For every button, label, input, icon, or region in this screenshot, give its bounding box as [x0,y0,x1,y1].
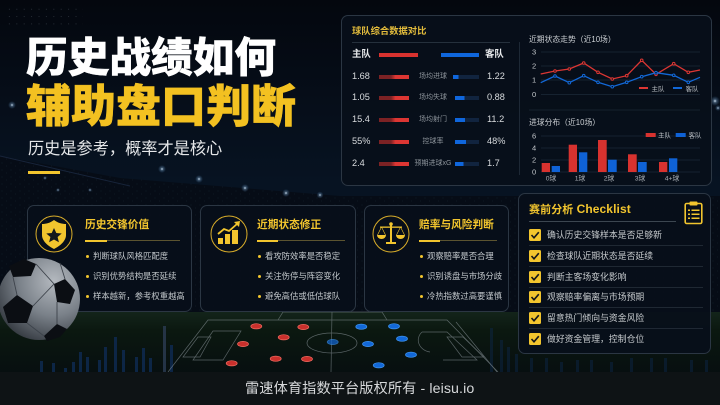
heading rule [85,240,180,241]
row: expected goals: 2.4 [352,158,365,168]
bullet list [86,251,185,301]
row: shots: 场均射门 [419,116,447,123]
row: goals scored: 场均进球 [419,73,447,80]
item divider [529,245,703,246]
bar chart: 主队 [658,130,672,140]
heading rule [419,240,497,241]
home header bar [379,52,418,56]
item divider [529,307,703,308]
bullet list [258,251,340,301]
item divider [529,287,703,288]
bar chart: 0 [532,168,536,176]
checklist item 4: 观察赔率偏离与市场预期 [547,292,644,302]
checklist item 3: 判断主客场变化影响 [547,272,627,282]
line chart [532,48,700,99]
row: expected goals: 预期进球xG [415,160,451,167]
bullet list [420,251,502,301]
bullet list: 识别优势结构是否延续 [93,271,176,281]
row: possession: 55% [352,136,370,146]
row: expected goals [352,158,500,168]
title line 2: 辅助盘口判断 [26,81,296,132]
checklist item 1: 确认历史交锋样本是否足够新 [547,230,662,240]
card heading: 历史交锋价值 [85,219,149,231]
line chart: 主队 [652,84,665,93]
bullet list: 识别诱盘与市场分歧 [427,271,502,281]
row: shots: 15.4 [352,114,370,124]
row: goals scored [352,71,505,81]
line chart: 客队 [686,84,699,93]
footer bar [0,372,720,405]
line chart: 0 [532,90,536,99]
checklist item 3 [529,271,627,283]
away header bar [441,52,479,56]
line chart: 1 [532,76,536,84]
row: shots: 11.2 [487,114,504,124]
row: possession: 48% [487,136,505,146]
bullet list: 冷热指数过高要谨慎 [427,291,502,301]
icon: scales [372,216,410,252]
line chart: 2 [532,62,536,70]
panel: recent form [200,205,356,312]
panel: history value [27,205,192,312]
bar chart: 2球 [604,174,614,182]
icon: shield [36,216,72,252]
divider between table and charts [519,42,520,175]
bar chart: 2 [532,156,536,164]
bullet list: 观察赔率是否合理 [427,251,494,261]
card heading: 赔率与风险判断 [419,219,494,231]
panel: odds and risk [364,205,509,312]
row: shots [352,114,504,124]
bar chart: 客队 [688,130,702,140]
row: goals conceded: 0.88 [487,92,505,102]
panel: checklist [518,193,711,354]
heading rule [529,221,676,222]
bullet list: 判断球队风格匹配度 [93,251,168,261]
checklist item 2: 检查球队近期状态是否延续 [547,251,653,261]
row: goals conceded [352,92,505,102]
bar chart: 4+球 [665,174,679,182]
panel: team data comparison [341,15,712,186]
bullet list: 关注伤停与阵容变化 [265,271,340,281]
divider [529,109,700,111]
row: goals scored: 1.68 [352,71,370,81]
row: expected goals: 1.7 [487,158,500,168]
item divider [529,266,703,267]
line chart: 3 [532,48,536,56]
home team label: 主队 [352,48,371,59]
row: possession [352,136,506,146]
bullet list: 避免高估或低估球队 [265,291,340,301]
away team label: 客队 [485,48,504,59]
bullet list: 看攻防效率是否稳定 [265,251,340,261]
row: goals scored: 1.22 [487,71,505,81]
bar chart: 6 [532,132,536,140]
bullet list: 样本越新，参考权重越高 [93,291,185,301]
checklist heading: 赛前分析 Checklist [529,202,631,216]
bar chart: 0球 [546,174,556,182]
subtitle: 历史是参考，概率才是核心 [28,140,222,158]
bar chart: 1球 [575,174,585,182]
bar chart: 3球 [635,174,645,182]
bar chart [532,130,702,182]
row: possession: 控球率 [422,138,444,145]
item divider [529,328,703,329]
accent line [28,171,60,174]
icon: rising chart [210,216,248,252]
bar chart heading: 进球分布（近10场） [529,118,600,127]
bar chart: 4 [532,144,536,152]
row: goals conceded: 1.05 [352,92,370,102]
icon: clipboard [684,202,703,224]
title line 1: 历史战绩如何 [26,34,276,81]
checklist item 5: 留意热门倾向与资金风险 [547,313,644,323]
heading rule [257,240,345,241]
row: goals conceded: 场均失球 [419,94,447,101]
divider [352,42,510,43]
footer copyright text: 雷速体育指数平台版权所有 - leisu.io [245,381,474,397]
checklist item 6: 做好资金管理，控制仓位 [547,334,644,344]
icon: soccer ball [0,258,80,340]
card heading: 近期状态修正 [257,219,321,231]
line chart heading: 近期状态走势（近10场） [529,35,616,44]
panel heading: 球队综合数据对比 [352,26,426,36]
